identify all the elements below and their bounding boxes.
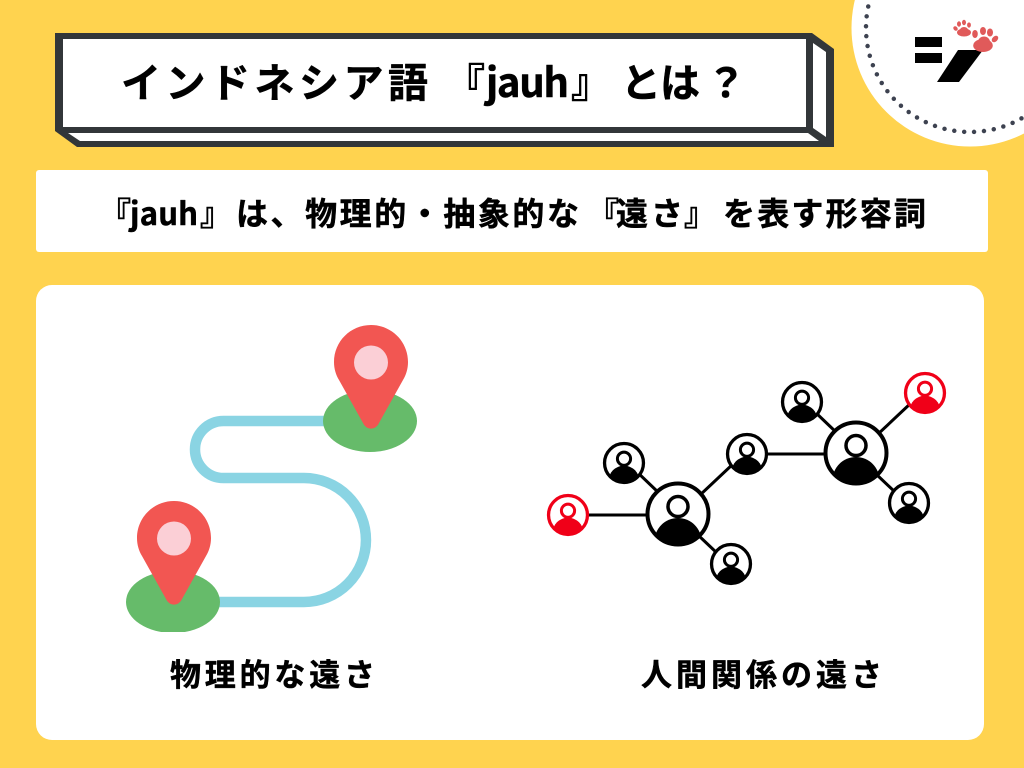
illustration: route map bbox=[126, 325, 417, 633]
subtitle panel bbox=[36, 170, 988, 252]
route line bbox=[195, 421, 366, 602]
subtitle text: は、物理的・抽象的な bbox=[236, 189, 579, 235]
main panel bbox=[36, 285, 984, 740]
subtitle text: 『 bbox=[587, 189, 619, 235]
title text: ？ bbox=[706, 51, 746, 109]
subtitle text: jauh bbox=[128, 189, 198, 234]
title text: 』 bbox=[571, 51, 611, 109]
destination pin bbox=[323, 325, 417, 452]
subtitle text: 』 bbox=[684, 189, 716, 235]
label: relationship distance: 人間関係の遠さ bbox=[641, 650, 882, 695]
illustration: people network bbox=[549, 374, 944, 598]
title text: 『 bbox=[445, 51, 485, 109]
subtitle text: を表す形容詞 bbox=[723, 189, 926, 235]
subtitle text bbox=[99, 189, 926, 235]
title text: jauh bbox=[483, 51, 569, 109]
network connectors bbox=[580, 403, 911, 554]
subtitle text: 』 bbox=[200, 189, 232, 235]
label: physical distance: 物理的な遠さ bbox=[170, 650, 375, 695]
title text bbox=[121, 51, 746, 109]
title box bbox=[55, 33, 834, 147]
person nodes bbox=[549, 374, 944, 598]
subtitle text: 遠さ bbox=[616, 189, 683, 235]
title text: とは bbox=[621, 51, 700, 109]
title text: インドネシア語 bbox=[121, 51, 428, 109]
subtitle text: 『 bbox=[99, 189, 131, 235]
origin pin bbox=[126, 501, 220, 633]
logo badge bbox=[852, 0, 1024, 146]
